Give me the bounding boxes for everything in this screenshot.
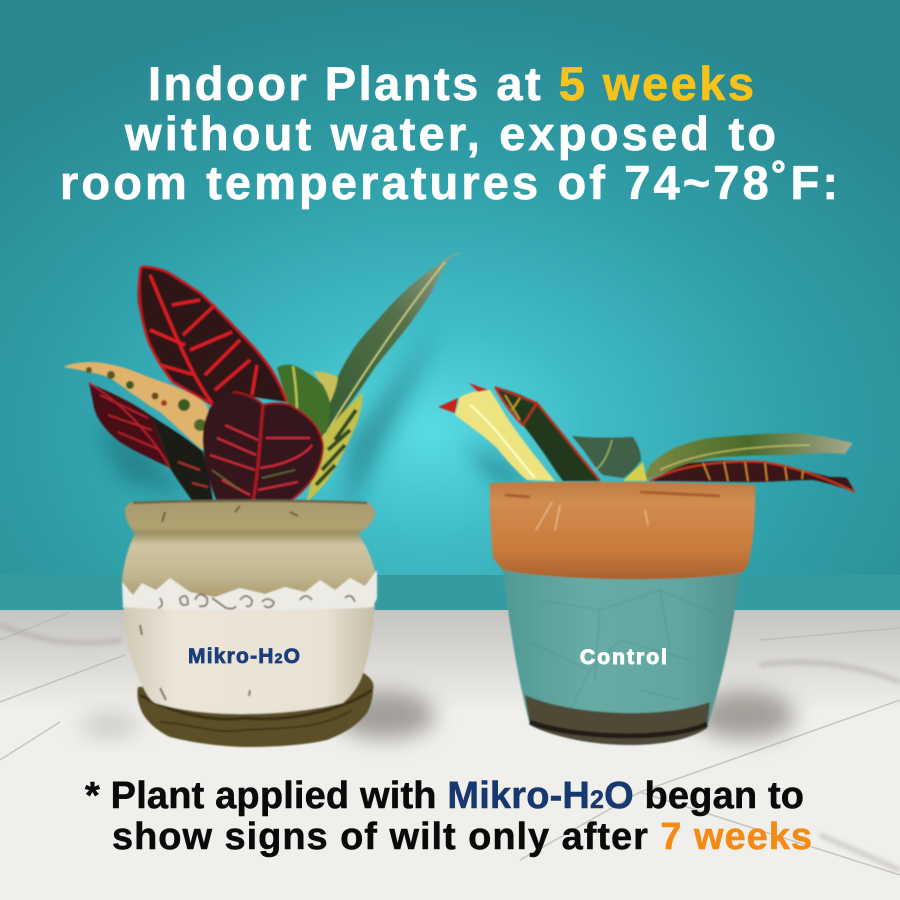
wall background	[0, 0, 900, 580]
decorative white band	[122, 570, 377, 610]
leaf tips: red	[438, 383, 488, 413]
leaf: tall green	[320, 252, 463, 437]
marble floor	[0, 610, 900, 900]
leaf: yellow green variegated	[306, 392, 363, 502]
footnote: show signs of wilt only after 7 weeks	[112, 816, 812, 858]
title: without water, exposed to	[124, 107, 776, 160]
footnote: * Plant applied with Mikro-H2O began to	[85, 775, 804, 817]
soil stain	[525, 695, 710, 745]
title: Indoor Plants at 5 weeks	[148, 57, 754, 110]
floor shadows	[335, 691, 435, 739]
wall baseboard	[0, 575, 900, 611]
glazed upper body	[122, 500, 377, 600]
saucer	[137, 672, 374, 747]
white lower body	[123, 605, 375, 714]
footnote	[85, 775, 812, 858]
crackle lines	[525, 590, 720, 710]
plant: wilted control plant	[438, 383, 855, 745]
leaf: left dark red	[89, 383, 170, 468]
leaf: center green	[572, 436, 641, 478]
leaf: drooping green	[643, 433, 853, 481]
pot: cream ceramic pot	[122, 500, 377, 747]
leaf: back green	[277, 365, 330, 433]
leaf: yellow left	[455, 390, 555, 481]
leaf: striped dark red	[650, 461, 855, 492]
plant shadows on wall	[95, 325, 530, 520]
pot: terracotta and teal pot	[490, 482, 755, 745]
specks	[140, 506, 298, 700]
title: room temperatures of 74~78˚F:	[60, 156, 838, 209]
leaf: dark green-black	[150, 415, 213, 502]
plant: healthy Mikro-H2O plant	[63, 252, 463, 747]
pot label: Mikro-H2O: Mikro-H2O	[188, 645, 300, 668]
title	[60, 57, 838, 209]
leaf: orange spotted	[63, 362, 208, 450]
leaf: center dark red	[495, 387, 600, 481]
leaf: small yellow back	[313, 371, 338, 405]
pot label: Control: Control	[580, 646, 667, 669]
leaf: tall red	[138, 267, 287, 405]
leaf: small yellow	[623, 462, 647, 481]
leaf: front dark	[203, 392, 323, 502]
